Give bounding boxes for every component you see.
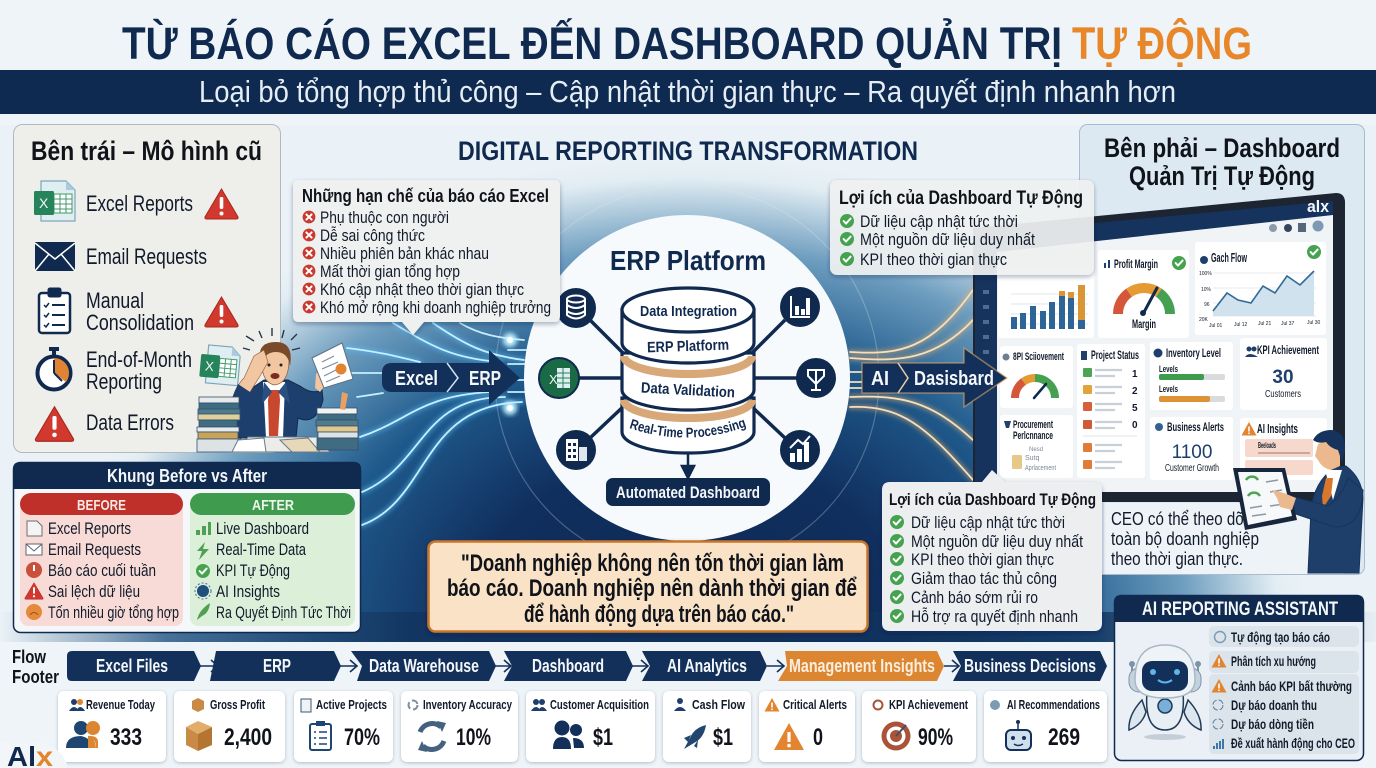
card: inventory level — [1150, 342, 1233, 410]
flow lines left — [340, 323, 526, 525]
column: before: Báo cáo cuối tuần — [48, 561, 156, 580]
step: management insights: Management Insights — [789, 656, 935, 676]
automated dashboard button: Automated Dashboard — [616, 483, 760, 502]
card: inventory accuracy: Inventory Accuracy — [423, 697, 513, 712]
card: critical alerts — [759, 691, 855, 762]
card: critical alerts: 0 — [813, 724, 823, 751]
CEO body — [1308, 466, 1363, 573]
icon: bar chart — [780, 287, 820, 327]
panel: before vs after — [13, 462, 361, 632]
card: customer acquisition: $1 — [593, 724, 613, 751]
card: cash flow: Cash Flow — [692, 697, 746, 712]
flow footer chevrons — [67, 651, 1107, 681]
device screen — [997, 215, 1333, 492]
device frame — [973, 193, 1345, 502]
assistant list: Dự báo doanh thu — [1231, 697, 1317, 713]
title: TỰ ĐỘNG — [1072, 18, 1252, 69]
icon: email — [35, 242, 75, 271]
arrow: AI to dashboard — [862, 348, 1007, 407]
column: after — [190, 493, 355, 626]
ERP circle — [524, 215, 850, 540]
desk papers — [232, 437, 330, 452]
card: project status: 5 — [1132, 403, 1138, 414]
label: manual consolidation: Consolidation — [86, 310, 194, 335]
limitations list: Phụ thuộc con người — [320, 208, 449, 227]
card: procurement: Aprlacement — [1025, 465, 1056, 472]
icon: excel circle: X — [549, 372, 558, 387]
card: kpi achievement: 90% — [918, 724, 953, 751]
card: kpi achievement: KPI Achievement — [1257, 343, 1319, 357]
card: cash flow: Jul 01 — [1209, 323, 1223, 329]
excel file icon — [199, 344, 241, 386]
step: erp: ERP — [263, 656, 291, 676]
card: active projects — [294, 691, 393, 762]
step: dashboard: Dashboard — [532, 656, 604, 676]
callout: CEO note — [1104, 503, 1344, 574]
column: after: AFTER — [252, 497, 294, 514]
assistant list: Dự báo dòng tiền — [1231, 716, 1314, 732]
callout: quote — [428, 542, 868, 632]
step: business decisions: Business Decisions — [964, 656, 1096, 676]
column: after: Ra Quyết Định Tức Thời — [216, 603, 351, 622]
icon: database — [556, 288, 596, 328]
callout: Excel limitations — [293, 180, 560, 335]
label: end of month reporting: Reporting — [86, 369, 162, 394]
sidebar — [975, 256, 997, 492]
card: cash flow: Jul 21 — [1258, 321, 1272, 327]
down arrow — [682, 454, 694, 478]
card: gross profit — [174, 691, 285, 762]
worker figure — [232, 328, 326, 438]
card: business alerts: Business Alerts — [1167, 420, 1224, 434]
callout: dashboard benefits bottom: Hỗ trợ ra quyết định nhanh — [911, 607, 1078, 626]
step: ai analytics: AI Analytics — [667, 656, 747, 676]
icon: network — [796, 358, 836, 398]
card: customer acquisition — [526, 691, 655, 762]
icon: excel circle — [539, 358, 579, 398]
icon: growth chart — [780, 430, 820, 470]
card: inventory level: Levels — [1159, 364, 1178, 374]
assistant list: Tự động tạo báo cáo — [1231, 629, 1330, 645]
card: revenue today — [58, 691, 166, 762]
limitations list: Khó cập nhật theo thời gian thực — [320, 280, 524, 299]
card: cash flow: 20K — [1199, 317, 1209, 323]
card: procurement: Nesd — [1029, 447, 1043, 453]
card: customer acquisition: Customer Acquisition — [550, 697, 649, 712]
flow lines right — [850, 290, 973, 480]
step: data warehouse: Data Warehouse — [369, 656, 479, 676]
step: excel files: Excel Files — [96, 656, 168, 676]
card: ai insights — [1240, 418, 1327, 480]
icon: buildings — [556, 430, 596, 470]
card: cash flow: $1 — [713, 724, 733, 751]
step: management insights — [778, 651, 944, 681]
gauge — [1118, 288, 1170, 314]
card: kpi achievement — [1240, 338, 1327, 410]
label: excel reports: Excel Reports — [86, 191, 193, 216]
callout: quote: báo cáo. Doanh nghiệp nên dành thời gian để — [447, 575, 857, 602]
card: cash flow — [1195, 242, 1326, 335]
label: manual consolidation — [86, 288, 194, 335]
central heading: DIGITAL REPORTING TRANSFORMATION — [458, 136, 918, 166]
paper in hand — [312, 343, 353, 388]
callout: quote: để hành động dựa trên báo cáo." — [524, 601, 794, 628]
subtitle band — [0, 70, 1376, 114]
card: project status: 2 — [1132, 386, 1138, 397]
card: ai recommendations: 269 — [1048, 724, 1080, 751]
layer labels: Real-Time Processing — [630, 419, 746, 438]
assistant list — [1209, 626, 1359, 754]
card: kpi gauge: 8PI Sciiovement — [1013, 351, 1064, 363]
paper stack left — [197, 397, 241, 452]
card: cash flow: 100% — [1199, 271, 1212, 277]
panel header — [1114, 595, 1364, 622]
column: after: AI Insights — [216, 582, 280, 601]
label: email requests: Email Requests — [86, 244, 207, 269]
callout: dashboard benefits bottom: Một nguồn dữ liệu duy nhất — [911, 533, 1083, 551]
step: erp — [210, 651, 341, 681]
card: ai recommendations: AI Recommendations — [1007, 697, 1100, 712]
callout: dashboard benefits top: Lợi ích của Dashboard Tự Động — [839, 188, 1083, 209]
icon: excel — [34, 181, 75, 221]
limitations list: Mất thời gian tổng hợp — [320, 262, 460, 281]
column: before: Tốn nhiều giờ tổng hợp — [48, 603, 179, 622]
connector arrows — [200, 660, 959, 672]
card: critical alerts: Critical Alerts — [783, 697, 847, 712]
card: project status — [1077, 344, 1145, 478]
callout: dashboard benefits bottom: Dữ liệu cập nhật tức thời — [911, 514, 1065, 532]
flow footer label: Footer — [12, 667, 59, 687]
panel: dashboard side — [1080, 124, 1364, 574]
layer labels: Data Integration — [640, 303, 737, 320]
callout: dashboard benefits bottom: Cảnh báo sớm rủi ro — [911, 589, 1038, 607]
limitations list: Khó mở rộng khi doanh nghiệp trưởng — [320, 298, 551, 317]
card: cash flow: 10% — [1201, 287, 1212, 293]
arrow: excel to ERP — [382, 350, 520, 405]
callout: dashboard benefits bottom: Giảm thao tác thủ công — [911, 570, 1057, 588]
step: excel files — [67, 651, 201, 681]
card: inventory accuracy: 10% — [456, 724, 491, 751]
card: procurement: Perlcnnance — [1013, 430, 1053, 442]
label: data errors: Data Errors — [86, 410, 174, 435]
icon: stopwatch — [38, 347, 70, 390]
callout: dashboard benefits top — [830, 180, 1094, 275]
card: inventory level: Inventory Level — [1166, 346, 1221, 360]
arrow: AI to dashboard: AI — [871, 368, 889, 390]
card: inventory level: Levels — [1159, 384, 1178, 394]
card: profit margin: Profit Margin — [1114, 257, 1158, 271]
card: active projects: 70% — [344, 724, 380, 751]
column: before: Email Requests — [48, 540, 141, 559]
icon: warning — [205, 189, 238, 219]
layer labels — [630, 303, 746, 438]
callout: dashboard benefits bottom — [882, 470, 1102, 631]
step: business decisions — [953, 651, 1107, 681]
KPI cards — [58, 691, 1107, 762]
card: ai recommendations — [984, 691, 1107, 762]
card: kpi achievement — [862, 691, 976, 762]
card: business alerts: Customer Growth — [1165, 463, 1219, 474]
column: after: Real-Time Data — [216, 540, 306, 559]
assistant list: Phân tích xu hướng — [1231, 653, 1316, 669]
arrow: excel to ERP: ERP — [469, 368, 501, 390]
tablet — [1233, 468, 1297, 530]
card: business alerts — [1150, 417, 1233, 480]
card: ai insights: AI Insights — [1257, 421, 1298, 436]
card: business alerts: 1100 — [1172, 442, 1212, 463]
card: cash flow: Jul 30 — [1307, 320, 1321, 326]
label: end of month reporting — [86, 347, 192, 394]
CEO head — [1315, 440, 1340, 470]
icon: clipboard — [39, 288, 70, 333]
step: ai analytics — [642, 651, 767, 681]
logo: ALX — [0, 741, 68, 768]
card: kpi achievement: KPI Achievement — [889, 697, 968, 712]
callout: dashboard benefits top: Dữ liệu cập nhật tức thời — [860, 212, 1018, 231]
card: kpi achievement: Customers — [1265, 389, 1301, 400]
column: after: KPI Tự Động — [216, 561, 290, 580]
arrow: AI to dashboard: Dasisbard — [914, 368, 994, 390]
card: procurement: Procurement — [1013, 419, 1053, 431]
column: before: Excel Reports — [48, 519, 131, 538]
column: before: Sai lệch dữ liệu — [48, 582, 140, 601]
limitations list: Dễ sai công thức — [320, 226, 425, 245]
automated dashboard button — [606, 478, 770, 506]
robot — [1129, 645, 1201, 740]
step: data warehouse — [351, 651, 496, 681]
cylinder stack — [622, 288, 754, 453]
card: project status: 0 — [1132, 420, 1138, 431]
card: project status: 1 — [1132, 369, 1138, 380]
dashboard device — [973, 193, 1345, 502]
ERP title: ERP Platform — [610, 245, 766, 276]
CEO figure with tablet — [1233, 430, 1363, 573]
card: gross profit: 2,400 — [224, 724, 272, 751]
arrow: excel to ERP: Excel — [395, 368, 438, 390]
stressed worker illustration — [197, 328, 358, 452]
paper stack right — [316, 392, 358, 450]
panel title — [1104, 133, 1340, 191]
layer labels: Data Validation — [641, 380, 735, 401]
callout: CEO note: CEO có thể theo dõi — [1111, 509, 1247, 529]
icon: warning — [205, 297, 238, 327]
brand mark: alx — [1307, 197, 1329, 216]
panel title: Bên trái – Mô hình cũ — [31, 136, 262, 166]
card: cash flow — [663, 691, 751, 762]
flow footer label — [12, 647, 59, 687]
card: ai insights: Beeloads — [1258, 441, 1276, 450]
hand — [1272, 490, 1296, 510]
panel title: Quản Trị Tự Động — [1129, 161, 1315, 191]
card: cash flow: Gach Flow — [1211, 250, 1247, 265]
callout: quote: "Doanh nghiệp không nên tốn thời gian làm — [461, 550, 844, 577]
title: TỪ BÁO CÁO EXCEL ĐẾN DASHBOARD QUẢN TRỊ — [122, 18, 1062, 69]
callout: CEO note: toàn bộ doanh nghiệp — [1111, 529, 1259, 549]
card: cash flow: Jul 12 — [1234, 322, 1248, 328]
callout: dashboard benefits top: KPI theo thời gian thực — [860, 250, 1007, 269]
card: revenue today: Revenue Today — [86, 697, 156, 712]
card: kpi achievement: 30 — [1272, 367, 1294, 388]
callout title: Những hạn chế của báo cáo Excel — [302, 186, 549, 206]
card: project status: Project Status — [1091, 348, 1139, 362]
callout: dashboard benefits bottom: KPI theo thời gian thực — [911, 551, 1054, 569]
panel: old model — [14, 124, 280, 452]
flow footer label: Flow — [12, 647, 47, 667]
connector spokes — [575, 320, 800, 438]
card: procurement — [1000, 415, 1073, 478]
card: kpi gauge — [1000, 346, 1073, 408]
callout: dashboard benefits bottom: Lợi ích của Dashboard Tự Động — [889, 490, 1096, 509]
device header — [976, 201, 1333, 258]
callout: CEO note: theo thời gian thực. — [1111, 549, 1243, 569]
column: before: BEFORE — [77, 497, 126, 514]
limitations list — [303, 208, 551, 317]
label: end of month reporting: End-of-Month — [86, 347, 192, 372]
layer labels: ERP Platform — [647, 337, 729, 356]
step: dashboard — [504, 651, 633, 681]
frame header — [13, 462, 361, 489]
column: before — [20, 493, 183, 626]
label: manual consolidation: Manual — [86, 288, 144, 313]
card: cash flow: 96 — [1204, 302, 1210, 308]
subtitle band: Loại bỏ tổng hợp thủ công – Cập nhật thời gian thực – Ra quyết định nhanh hơn — [199, 74, 1176, 109]
chart card: bars — [998, 270, 1094, 338]
card: profit margin — [1098, 250, 1189, 338]
card: active projects: Active Projects — [316, 697, 387, 712]
toolbar icons — [1269, 220, 1324, 232]
panel: AI reporting assistant — [1114, 595, 1364, 760]
card: cash flow: Jul 37 — [1281, 321, 1295, 327]
card: inventory accuracy — [401, 691, 518, 762]
card: gross profit: Gross Profit — [210, 697, 265, 712]
limitations list: Nhiều phiên bản khác nhau — [320, 244, 489, 263]
column: after: Live Dashboard — [216, 519, 309, 538]
card: procurement: Sutq — [1025, 455, 1040, 462]
CEO arm — [1290, 478, 1363, 527]
callout: dashboard benefits top: Một nguồn dữ liệu duy nhất — [860, 230, 1035, 249]
card: revenue today: 333 — [110, 724, 142, 751]
card: profit margin: Margin — [1132, 317, 1156, 331]
icon: data errors warning — [35, 407, 74, 441]
frame title: Khung Before vs After — [107, 466, 267, 486]
